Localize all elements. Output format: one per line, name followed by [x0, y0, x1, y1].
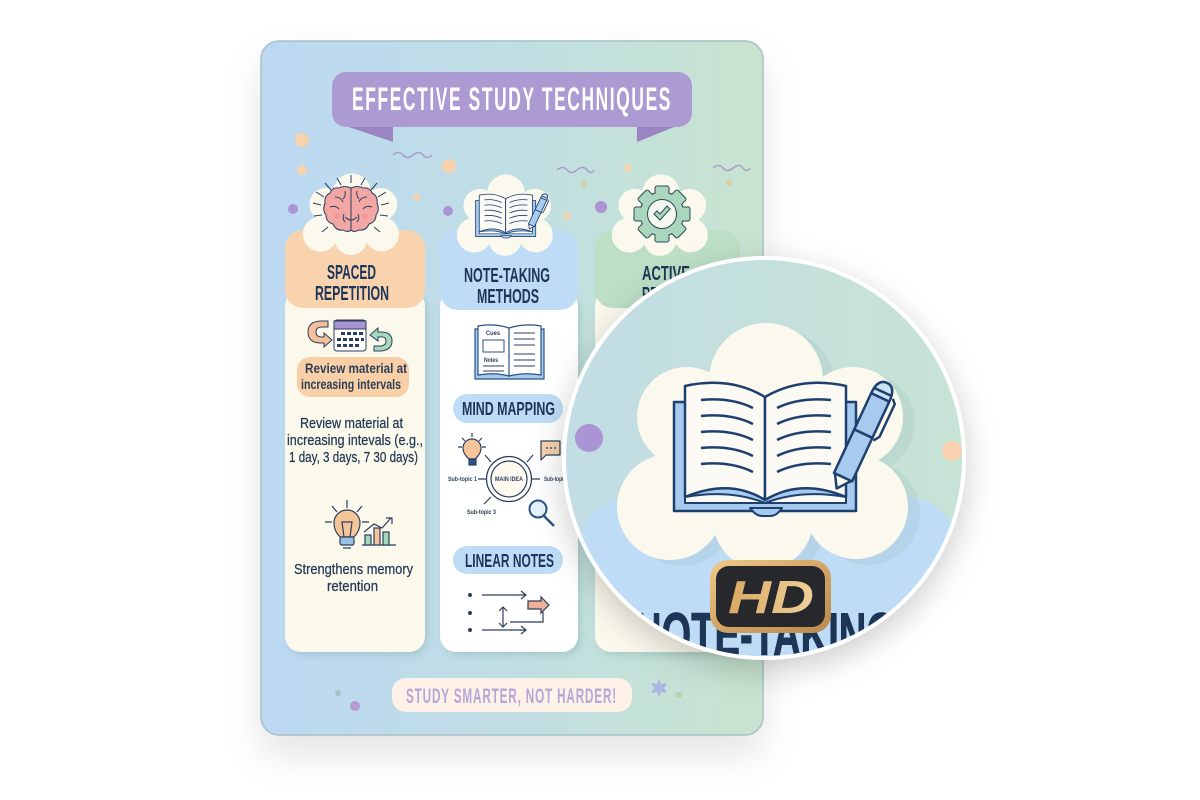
text: interval description	[287, 415, 423, 466]
icon: calendar with arrows	[308, 320, 392, 351]
magnifier circle	[560, 250, 970, 717]
label: mind mapping	[453, 394, 563, 423]
column: active recall	[595, 230, 740, 652]
heading: active recall	[642, 263, 690, 306]
footer decorations	[335, 679, 682, 711]
label: linear notes: LINEAR NOTES	[465, 551, 554, 571]
diagram: mind map: Sub-topic 3	[467, 510, 497, 516]
heading: note-taking methods: METHODS	[477, 286, 539, 308]
text: interval description: 1 day, 3 days, 7 30 days)	[289, 449, 418, 466]
HD badge: HD	[728, 571, 814, 623]
diagram: mind map: MAIN IDEA	[495, 477, 524, 483]
heading: active recall: RECALL	[642, 284, 688, 306]
icon: cornell notes book: Cues	[486, 331, 501, 337]
diagram: mind map: Sub-topic	[544, 477, 567, 483]
callout: review material: increasing intervals	[301, 376, 401, 392]
title banner: EFFECTIVE STUDY TECHNIQUES	[352, 81, 672, 117]
text: memory retention	[294, 561, 413, 595]
title banner	[332, 72, 692, 142]
heading: spaced repetition: REPETITION	[315, 283, 389, 305]
icon: book and pen in cloud	[457, 174, 553, 256]
heading: active recall: ACTIVE	[642, 263, 690, 285]
decorative dots and waves	[288, 133, 750, 220]
text: memory retention: Strengthens memory	[294, 561, 413, 578]
text: memory retention: retention	[327, 578, 378, 595]
column: note-taking methods	[440, 230, 578, 652]
column: spaced repetition	[285, 230, 425, 652]
footer slogan: STUDY SMARTER, NOT HARDER!	[406, 685, 617, 708]
text: interval description: increasing intevals (e.g.,	[287, 432, 423, 449]
magnified cloud	[617, 323, 908, 570]
footer slogan	[392, 678, 632, 712]
heading: spaced repetition: SPACED	[327, 262, 376, 284]
heading: note-taking methods: NOTE-TAKING	[464, 265, 550, 287]
callout: review material: Review material at	[305, 360, 407, 376]
heading: note-taking methods	[464, 265, 550, 308]
magnified heading text: NOTE-TAKING	[634, 601, 896, 668]
magnified book and pen icon	[674, 379, 902, 516]
magnified column header	[581, 497, 951, 656]
callout: review material	[297, 357, 409, 397]
poster panel	[261, 41, 763, 735]
icon: cornell notes book: Notes	[484, 358, 499, 364]
magnified cloud shadow	[654, 334, 920, 566]
label: linear notes	[453, 546, 563, 574]
icon: brain in cloud	[303, 173, 399, 255]
text: interval description: Review material at	[300, 415, 404, 432]
HD badge	[710, 560, 831, 633]
label: mind mapping: MIND MAPPING	[462, 399, 555, 419]
heading: spaced repetition	[315, 262, 389, 305]
icon: light bulb with chart	[325, 500, 396, 548]
diagram: mind map	[448, 433, 567, 526]
diagram: mind map: Sub-topic 1	[448, 477, 478, 483]
icon: gear check in cloud	[612, 174, 708, 256]
icon: cornell notes book	[475, 325, 544, 379]
diagram: linear notes arrows	[469, 591, 549, 634]
